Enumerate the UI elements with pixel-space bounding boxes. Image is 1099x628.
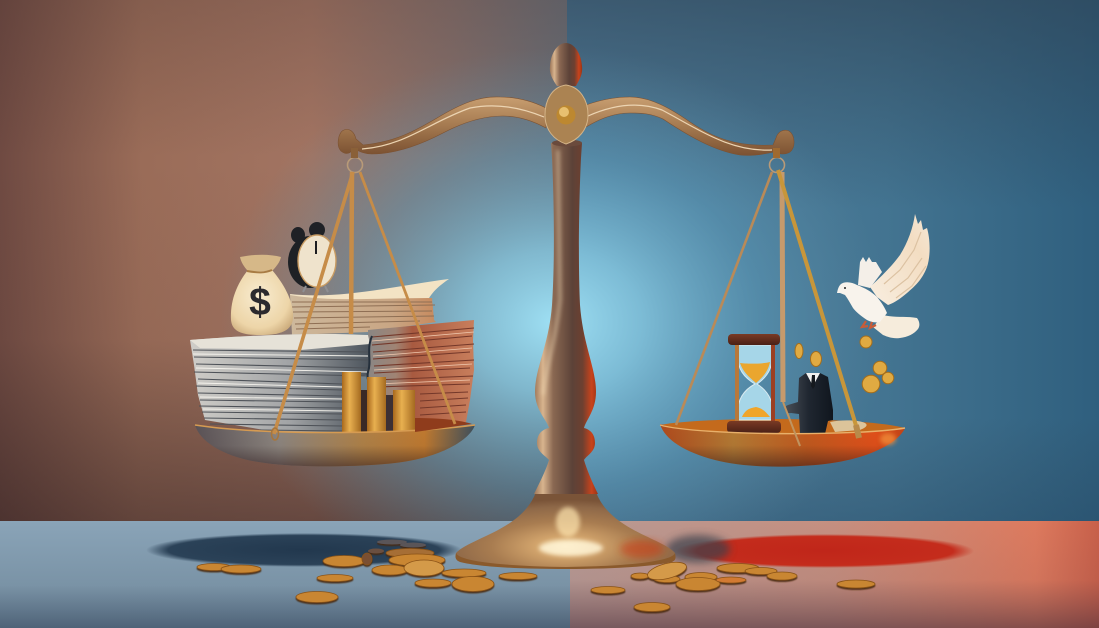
top loose sheet	[290, 279, 449, 308]
dove back wing	[858, 257, 882, 288]
left ropes	[272, 172, 455, 440]
left arm	[338, 97, 546, 154]
right pan load	[660, 214, 930, 434]
base	[456, 492, 675, 568]
base highlight	[539, 540, 603, 556]
column shine	[543, 150, 560, 395]
floor shadow: right pan	[676, 534, 974, 568]
dove	[837, 214, 930, 338]
right ropes	[676, 170, 859, 446]
right rope tails	[783, 402, 800, 446]
dove body	[837, 282, 887, 322]
pivot	[556, 106, 576, 124]
floor shadow: left pan	[146, 533, 462, 567]
right pan	[660, 424, 905, 467]
column collar	[552, 140, 582, 146]
dollar sign: $	[249, 281, 271, 324]
scale beam	[338, 43, 794, 172]
left pan	[195, 418, 475, 466]
scattered coins: right floor	[591, 559, 875, 612]
suit figure	[785, 373, 833, 434]
finial	[550, 43, 582, 86]
base red reflection	[620, 540, 664, 558]
base rim	[455, 553, 676, 569]
falling coins	[795, 336, 894, 393]
right pan inner	[660, 419, 905, 434]
hanger rings	[348, 158, 362, 172]
right arm	[586, 97, 794, 155]
hourglass	[727, 334, 781, 433]
coin stacks	[342, 372, 415, 434]
left rope hook	[272, 428, 278, 440]
dove tail	[873, 315, 919, 338]
money bag	[231, 255, 293, 335]
scattered coins: left floor	[197, 540, 537, 602]
left pan load	[190, 222, 474, 436]
center boss	[545, 85, 588, 144]
column	[534, 143, 598, 494]
upper paper stack	[290, 295, 436, 335]
scale stand: column and base	[455, 140, 676, 569]
alarm clock	[288, 222, 336, 292]
dove front wing	[870, 214, 930, 305]
grey paper stack	[190, 334, 372, 436]
floor shadow: right blend near base	[666, 535, 730, 563]
red paper stack	[368, 320, 474, 432]
